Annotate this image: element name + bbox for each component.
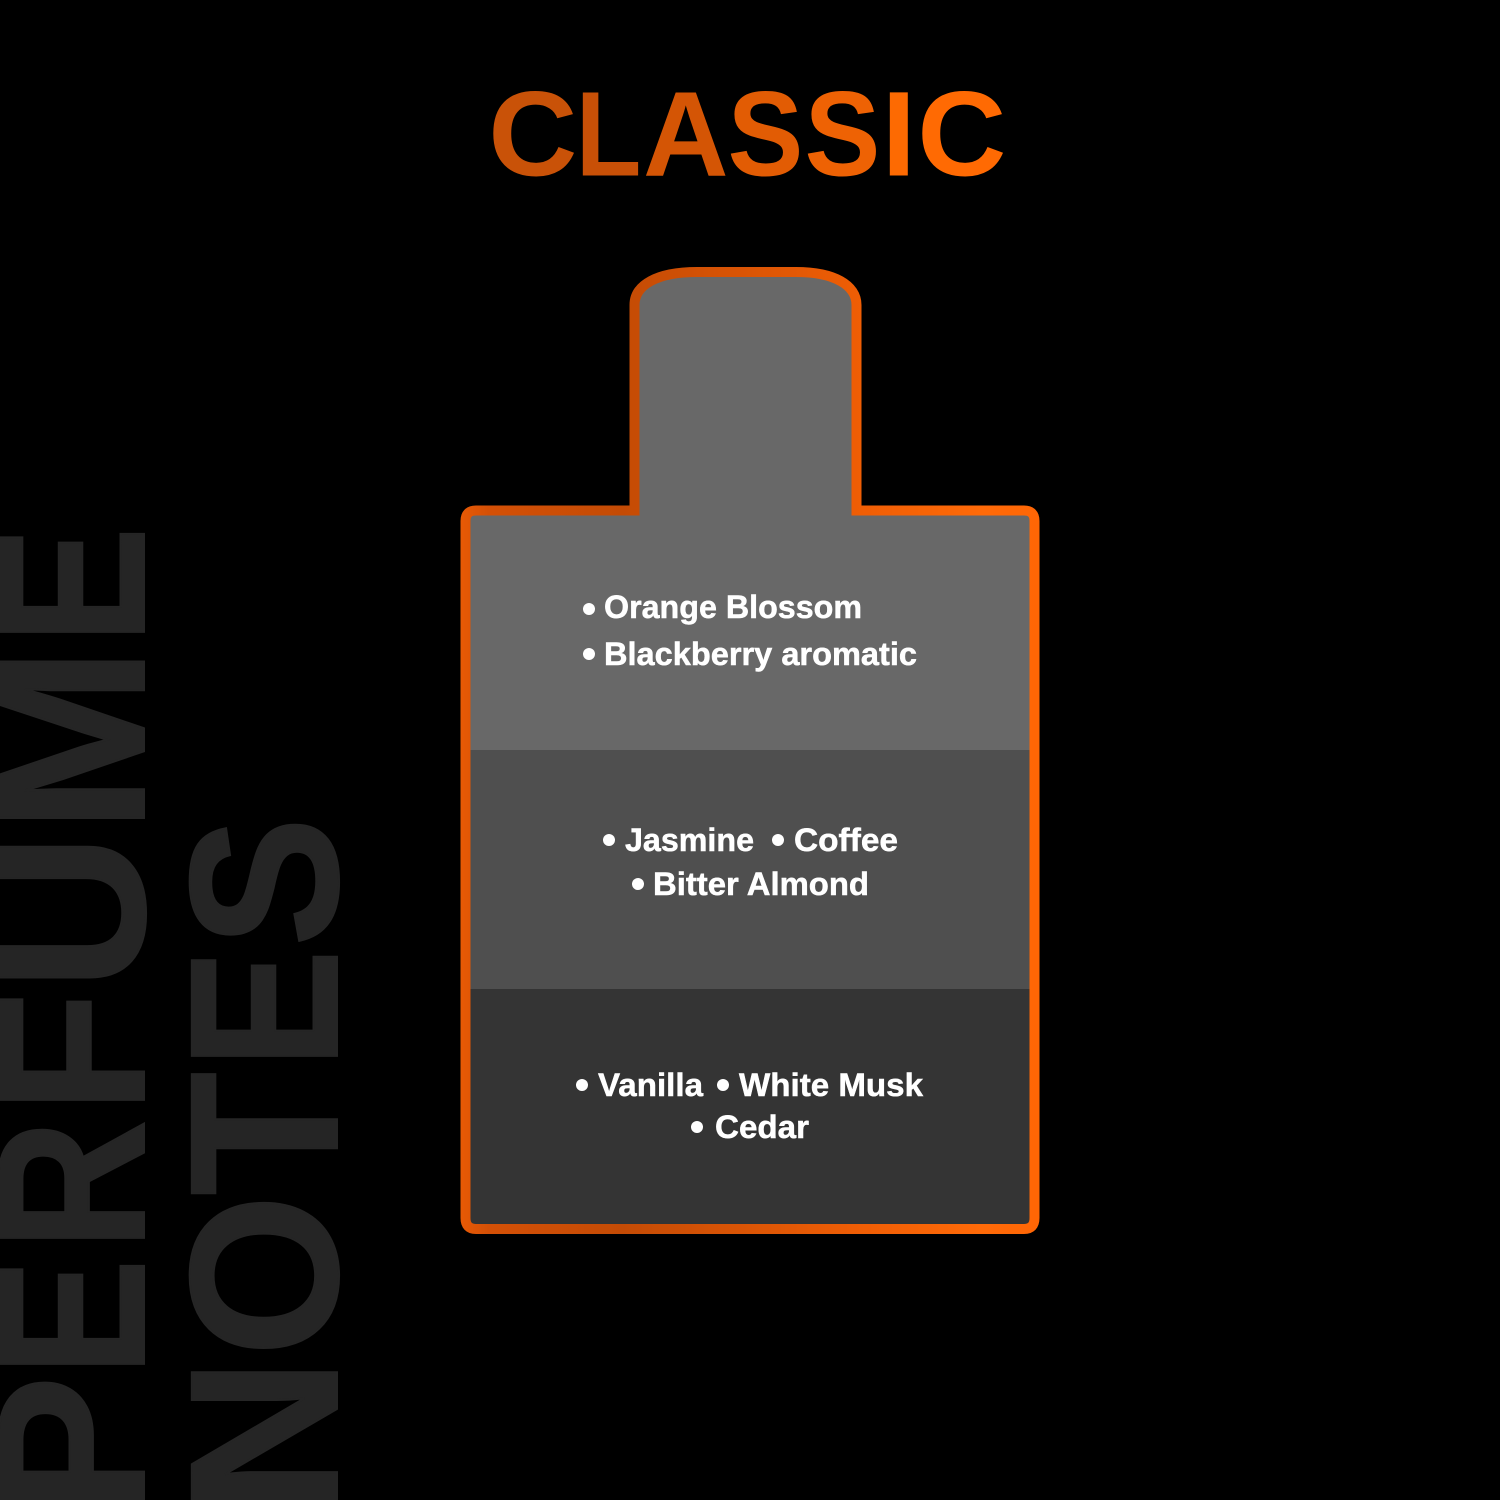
base notes: Vanilla [598,1067,703,1103]
middle notes: Bitter Almond [653,866,869,902]
base notes: Cedar [715,1109,809,1145]
title: A [643,67,729,202]
base notes [576,1067,923,1145]
vertical watermark: NOTES: T [146,1072,382,1196]
bottle [460,260,1040,1234]
title: S [727,66,803,201]
bottle outline [466,272,1034,1229]
title: S [804,66,880,201]
vertical watermark: NOTES: E [147,950,382,1068]
middle notes: Coffee [794,822,898,858]
middle notes: Jasmine [625,822,754,858]
vertical watermark: NOTES [145,817,382,1500]
title: C [488,66,577,201]
title: L [576,67,641,202]
vertical watermark: NOTES: O [147,1194,382,1357]
title: I [881,67,916,202]
top notes: Blackberry aromatic [604,636,917,672]
middle notes [603,822,898,902]
vertical watermark: PERFUME [0,527,190,1500]
top notes [583,589,917,672]
bottle layers [460,260,1040,1234]
vertical watermark: NOTES: S [145,817,382,947]
title: C [917,66,1006,201]
top notes: Orange Blossom [604,589,862,625]
base notes: White Musk [739,1067,923,1103]
title [488,66,1006,202]
